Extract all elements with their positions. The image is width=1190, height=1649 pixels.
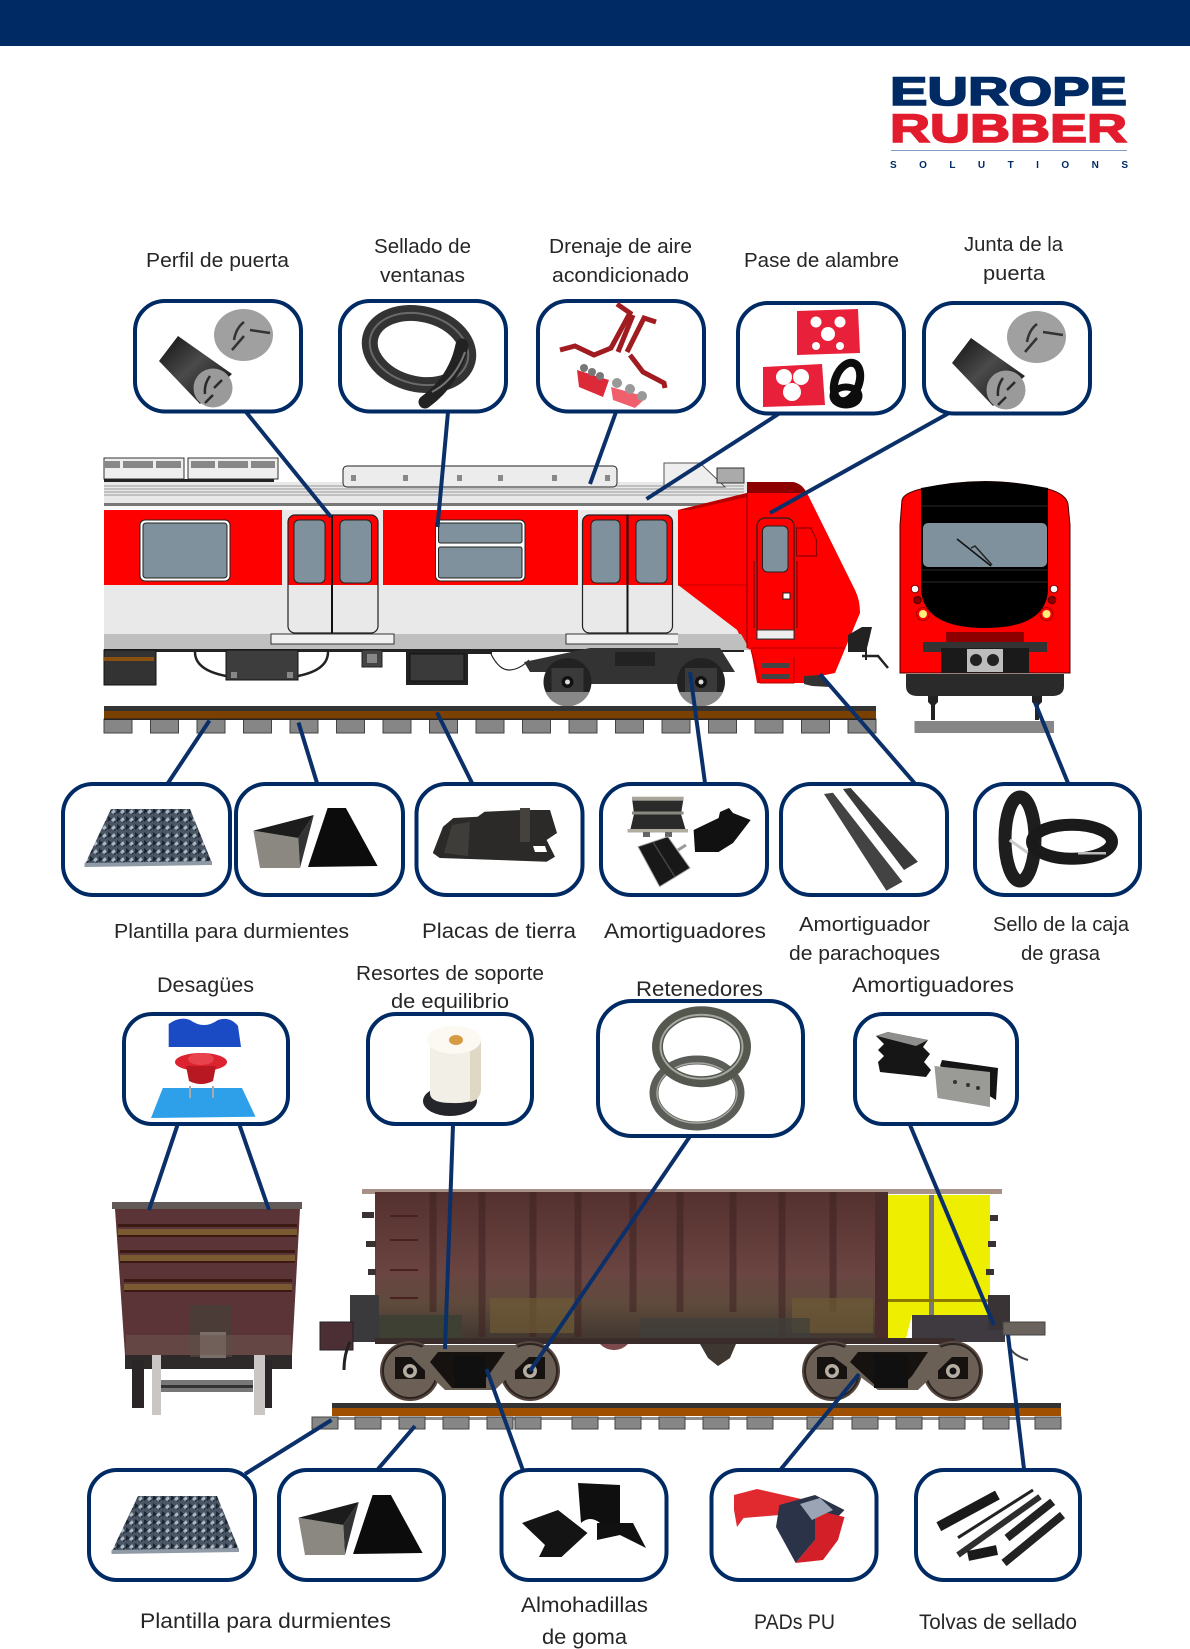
- callout: Plantilla cuñas (tren): [236, 784, 403, 895]
- callout: Amortiguador de parachoques: [781, 784, 947, 895]
- logo: Europe Rubber Solutions: RUBBER: [890, 107, 1127, 151]
- logo: Europe Rubber Solutions: EUROPE: [890, 70, 1127, 114]
- label: Sellado de ventanas: [374, 236, 471, 287]
- header bar: [0, 0, 1190, 46]
- electric train side view: [104, 458, 888, 706]
- callout: Amortiguadores (vagón): [855, 1014, 1017, 1124]
- label: Junta de la puerta: puerta: [983, 263, 1046, 285]
- label: Plantilla para durmientes vagón: Plantilla para durmientes: [140, 1610, 391, 1633]
- label: Junta de la puerta: Junta de la: [964, 234, 1064, 256]
- label: Drenaje de aire acondicionado: [549, 236, 692, 287]
- callout: Tolvas de sellado: [916, 1470, 1080, 1580]
- callout: Amortiguadores (tren): [601, 784, 767, 895]
- label: Amortiguador de parachoques: Amortiguador: [799, 914, 930, 936]
- label: Placas de tierra: Placas de tierra: [422, 920, 576, 943]
- label: Drenaje de aire acondicionado: Drenaje de aire: [549, 236, 692, 258]
- callout: Perfil de puerta: [135, 301, 301, 412]
- callout: Sellado de ventanas: [340, 301, 506, 412]
- label: Amortiguador de parachoques: de parachoques: [789, 943, 940, 965]
- label: Sello de la caja de grasa: Sello de la caja: [993, 914, 1130, 936]
- label: Sello de la caja de grasa: de grasa: [1021, 943, 1101, 965]
- label: Perfil de puerta: Perfil de puerta: [146, 250, 290, 272]
- callout: Plantilla para durmientes (vagón): [89, 1470, 255, 1580]
- label: Resortes de soporte de equilibrio: [356, 963, 544, 1013]
- label: Tolvas de sellado: Tolvas de sellado: [919, 1611, 1077, 1634]
- callout: Plantilla para durmientes (tren): [63, 784, 230, 895]
- callout: Desagües: [124, 1014, 288, 1124]
- label: Amortiguador de parachoques: [789, 914, 940, 965]
- label: Plantilla para durmientes: Plantilla para durmientes: [114, 921, 349, 943]
- track under wagon: [312, 1403, 1061, 1429]
- label: Almohadillas de goma: [521, 1594, 648, 1649]
- label: Amortiguadores vagón: Amortiguadores: [852, 974, 1014, 997]
- label: PADs PU: PADs PU: [754, 1611, 835, 1634]
- label: Resortes de soporte de equilibrio: Resortes de soporte: [356, 963, 544, 985]
- label: Resortes de soporte de equilibrio: de equilibrio: [391, 991, 509, 1013]
- label: Pase de alambre: Pase de alambre: [744, 250, 899, 272]
- label: Sellado de ventanas: ventanas: [380, 265, 465, 287]
- callout: Sello de la caja de grasa: [975, 784, 1140, 895]
- logo: Europe Rubber Solutions: [890, 70, 1128, 171]
- logo: Europe Rubber Solutions: SOLUTIONS: [890, 160, 1128, 171]
- callout: Junta de la puerta: [924, 303, 1090, 414]
- label: Almohadillas de goma: Almohadillas: [521, 1594, 648, 1617]
- callout: Placas de tierra: [416, 784, 582, 895]
- label: Retenedores: Retenedores: [636, 978, 763, 1001]
- callout: Pase de alambre: [738, 303, 904, 414]
- track under train: [104, 706, 876, 733]
- label: Junta de la puerta: [964, 234, 1064, 285]
- open wagon side view: [320, 1189, 1045, 1401]
- label: Drenaje de aire acondicionado: acondicionado: [552, 265, 689, 287]
- callout: Retenedores: [598, 1001, 803, 1136]
- label: Amortiguadores: Amortiguadores: [604, 920, 766, 943]
- callout: Plantilla cuñas (vagón): [279, 1470, 444, 1580]
- label: Desagües: Desagües: [157, 974, 254, 997]
- callout: Drenaje de aire acondicionado: [538, 301, 704, 412]
- label: Sellado de ventanas: Sellado de: [374, 236, 471, 258]
- callout: Resortes de soporte de equilibrio: [368, 1014, 532, 1124]
- connector lines: [149, 412, 1068, 1474]
- label: Almohadillas de goma: de goma: [542, 1626, 627, 1649]
- callout: PADs PU: [712, 1470, 876, 1580]
- wagon end view: [112, 1202, 302, 1415]
- callout: Almohadillas de goma: [502, 1470, 666, 1580]
- label: Sello de la caja de grasa: [993, 914, 1130, 965]
- train front view: [900, 482, 1070, 733]
